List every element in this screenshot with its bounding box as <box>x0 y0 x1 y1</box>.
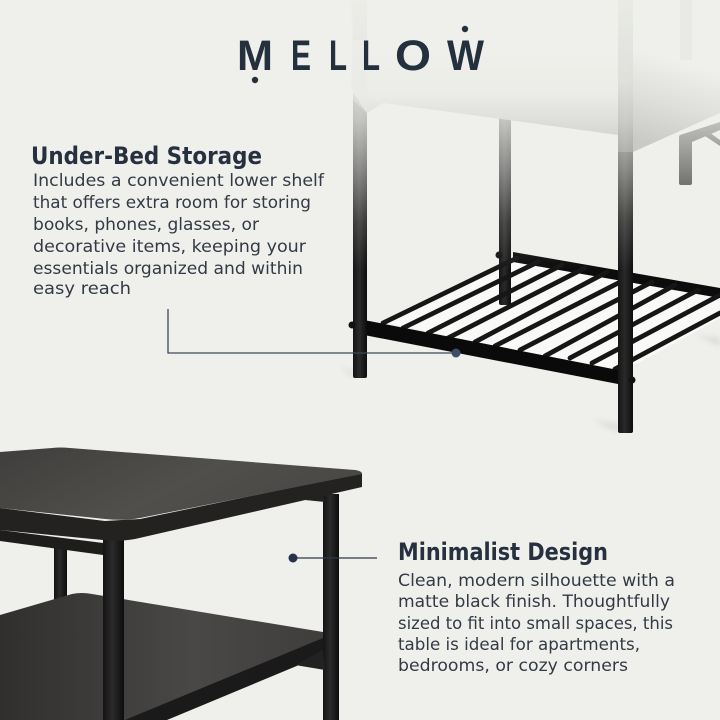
logo: MELLOW: E <box>291 32 311 80</box>
logo: MELLOW: L <box>362 32 380 80</box>
photo: upper table with slatted shelf <box>340 0 720 433</box>
floor shadows <box>340 335 720 432</box>
text block: minimalist design description: bedrooms, or cozy corners <box>398 656 628 675</box>
text block: under-bed storage description: that offers extra room for storing <box>33 193 311 212</box>
heading: Under-Bed Storage: Under-Bed Storage <box>31 142 262 170</box>
text block: under-bed storage description: Includes a convenient lower shelf <box>33 171 325 190</box>
text block: minimalist design description: table is ideal for apartments, <box>398 635 640 654</box>
front left leg <box>353 0 367 378</box>
text block: minimalist design description <box>398 571 675 675</box>
back rail <box>513 252 720 298</box>
logo: MELLOW <box>237 26 484 83</box>
back leg <box>54 545 67 605</box>
callout: under-bed storage pointer <box>168 309 460 358</box>
apron rail <box>0 530 103 555</box>
right leg <box>323 494 339 720</box>
callout: minimalist design pointer <box>288 554 377 562</box>
text block: minimalist design description: matte black finish. Thoughtfully <box>398 592 670 611</box>
right leg bracket <box>305 494 325 502</box>
text block: under-bed storage description <box>33 171 325 298</box>
heading: Minimalist Design: Minimalist Design <box>398 538 608 566</box>
tabletop underside <box>351 40 618 135</box>
far leg <box>679 135 692 185</box>
logo: MELLOW: M <box>237 32 273 80</box>
lower shelf surface <box>0 593 323 720</box>
logo: MELLOW: O <box>395 32 431 80</box>
front rail <box>364 320 618 384</box>
text block: under-bed storage description: easy reach <box>33 279 131 298</box>
lower shelf edge <box>125 638 323 720</box>
lower bracket <box>295 650 325 670</box>
text block: minimalist design description: sized to fit into small spaces, this <box>398 614 673 633</box>
front right leg <box>618 0 633 433</box>
tabletop surface <box>0 448 362 520</box>
text block: under-bed storage description: decorative items, keeping your <box>33 237 306 256</box>
tabletop edge <box>0 473 362 541</box>
text block: under-bed storage description: books, phones, glasses, or <box>33 215 259 234</box>
fade overlay <box>340 0 720 270</box>
front leg <box>103 538 124 720</box>
text block: minimalist design description: Clean, modern silhouette with a <box>398 571 675 590</box>
text block: under-bed storage description: essentials organized and within <box>33 259 303 278</box>
faint leg through tabletop <box>618 0 633 152</box>
tabletop side <box>633 50 720 152</box>
slats <box>383 258 720 369</box>
photo: lower table close-up <box>0 448 362 720</box>
shelf floor <box>383 258 720 372</box>
rear leg <box>499 60 511 305</box>
logo: MELLOW: L <box>329 32 347 80</box>
logo: MELLOW: W <box>447 32 484 80</box>
